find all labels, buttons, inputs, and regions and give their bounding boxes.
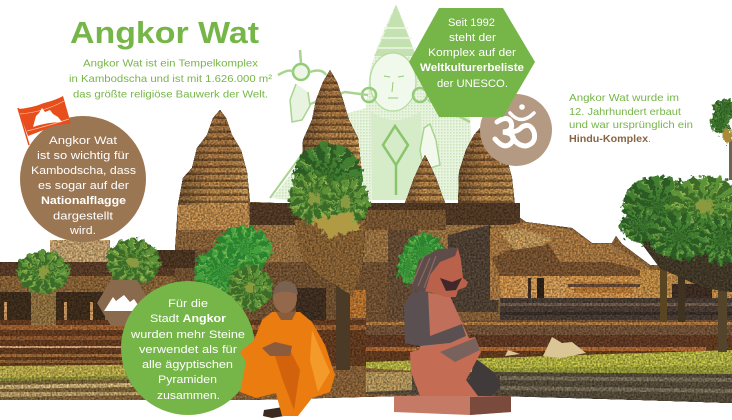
intro text: das größte religiöse Bauwerk der Welt.: [73, 88, 268, 100]
torso: [420, 292, 470, 352]
stone edge: [0, 378, 290, 400]
pyramids text: [130, 298, 245, 402]
pyramids text: Pyramiden: [158, 374, 217, 386]
rocks: [505, 337, 586, 358]
UNESCO text: Komplex auf der: [428, 47, 516, 59]
flag callout text: dargestellt: [53, 210, 113, 222]
photo: Angkor Wat temple: [0, 68, 732, 403]
intro text: in Kambodscha und ist mit 1.626.000 m²: [69, 73, 273, 85]
callout: pyramids circle: [97, 280, 255, 415]
palm: lone far right: [710, 100, 732, 180]
flag callout text: es sogar auf der: [38, 180, 129, 192]
UNESCO text: [420, 17, 524, 90]
text: Hindu complex note: Angkor Wat wurde im: [569, 92, 679, 104]
grass: [0, 363, 290, 385]
icon: mountains hexagon: [97, 280, 150, 326]
towers: [170, 68, 520, 230]
pyramids text: wurden mehr Steine: [130, 329, 245, 341]
palms: right group: [620, 176, 732, 352]
intro text: Angkor Wat ist ein Tempelkomplex: [83, 58, 259, 70]
gallery mid: [250, 203, 520, 225]
pyramids text: Stadt Angkor: [150, 313, 227, 325]
palm: large centre: [288, 144, 370, 370]
leg: [410, 337, 481, 396]
text: Hindu complex note: Hindu-Komplex.: [569, 133, 651, 145]
photo: monk in orange robe: [240, 281, 335, 418]
UNESCO text: Seit 1992: [448, 17, 495, 29]
pyramids text: alle ägyptischen: [142, 359, 233, 371]
flag callout text: Angkor Wat: [49, 135, 117, 147]
terrace bands: [0, 320, 732, 366]
pyramids text: verwendet als für: [139, 344, 237, 356]
flag callout text: wird.: [69, 225, 96, 237]
icon: om symbol badge: [480, 94, 552, 166]
text: Hindu complex note: 12. Jahrhundert erbaut: [569, 106, 681, 118]
head: [411, 248, 468, 297]
intro text: [69, 58, 273, 100]
UNESCO text: Weltkulturerbeliste: [420, 62, 524, 74]
illustration: green deity line drawing: [270, 4, 474, 200]
pyramids text: Für die: [168, 298, 208, 310]
title: Angkor Wat: [70, 15, 259, 50]
palms: small left trees: [18, 226, 444, 326]
statue base: [394, 396, 511, 415]
icon: Cambodian flag: [18, 96, 71, 145]
callout: UNESCO hexagon: [409, 8, 535, 117]
text: Hindu complex note: und war ursprünglich ein: [569, 119, 693, 131]
arm: [404, 290, 466, 346]
UNESCO text: steht der: [449, 32, 496, 44]
UNESCO text: der UNESCO.: [437, 78, 508, 90]
rear leg: [458, 358, 501, 396]
flag callout text: Kambodscha, dass: [31, 165, 137, 177]
photo: stone guardian statue: [394, 248, 511, 415]
temple structures: [0, 68, 732, 403]
pyramids text: zusammen.: [157, 390, 220, 402]
flag callout text: [31, 135, 137, 237]
flag callout text: Nationalflagge: [41, 195, 126, 207]
flag callout text: ist so wichtig für: [37, 150, 129, 162]
callout: national flag circle: [18, 96, 146, 242]
text: Hindu complex note: [569, 92, 693, 145]
left gallery: [0, 262, 175, 276]
